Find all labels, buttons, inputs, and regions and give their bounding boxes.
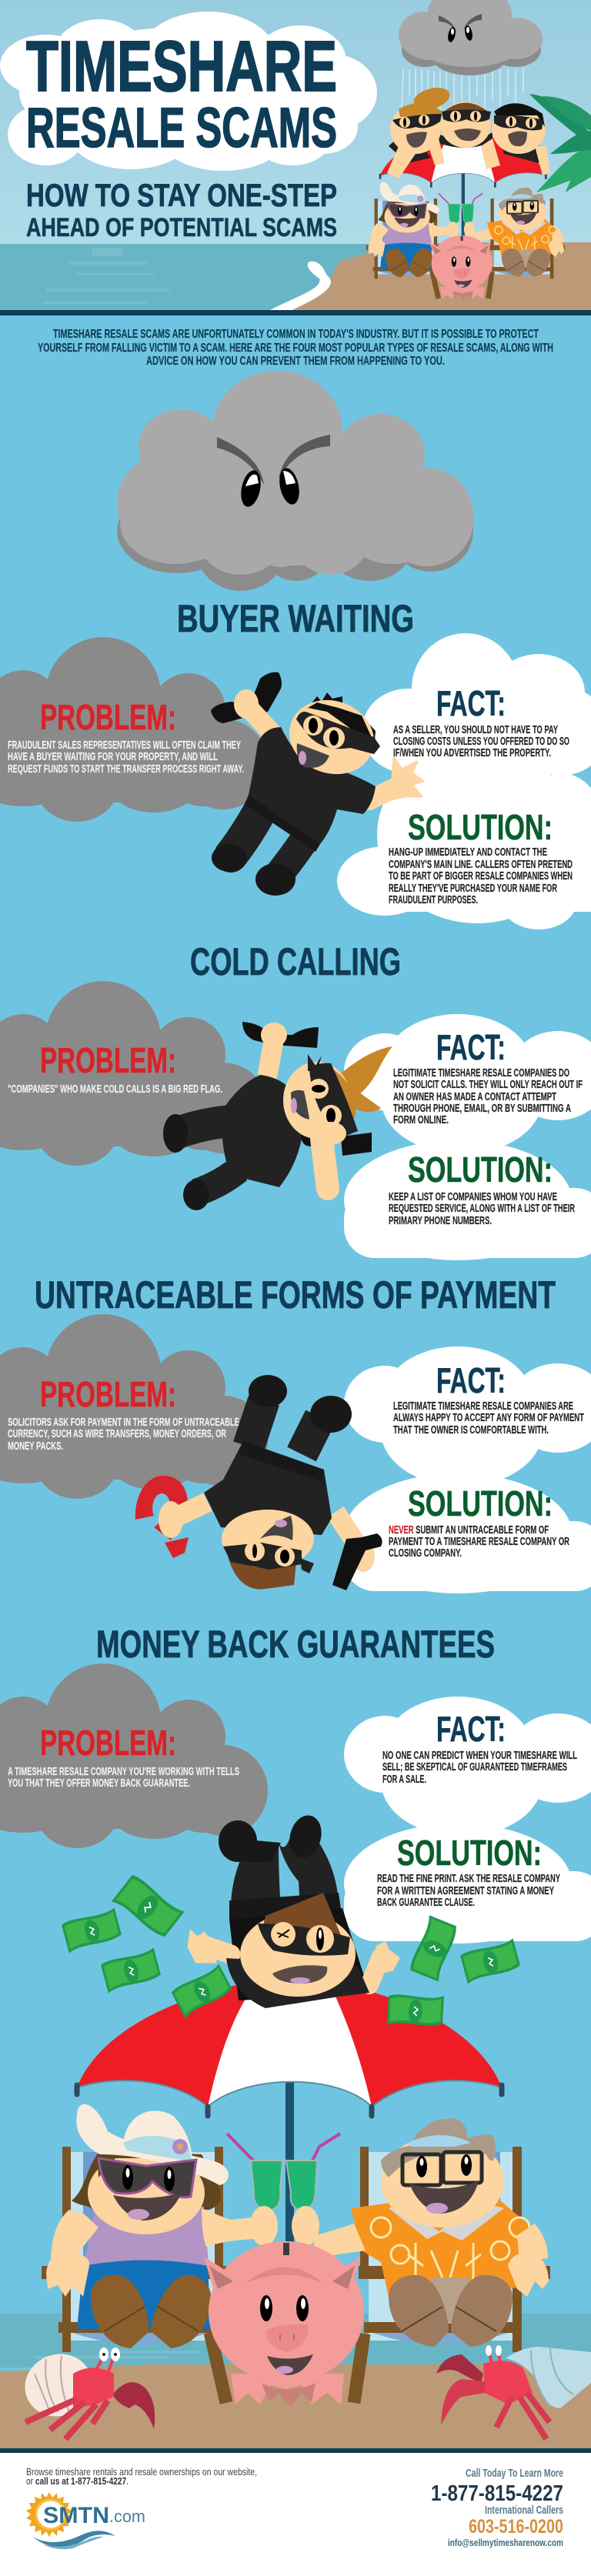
- logo: [26, 2492, 145, 2549]
- panel: cold calling fact and solution: FACT:: [436, 1027, 506, 1067]
- panel: money back fact and solution: BACK GUARANTEE CLAUSE.: [377, 1897, 475, 1909]
- hermit crab left: [16, 2344, 155, 2439]
- robber with phones: cold calling: [163, 1022, 392, 1210]
- panel: untraceable payment problem: [0, 1314, 268, 1499]
- title cloud: [0, 12, 377, 171]
- panel: buyer waiting problem: PROBLEM:: [40, 697, 176, 737]
- robber falling onto umbrella: [189, 1812, 399, 2008]
- section heading: cold calling: COLD CALLING: [190, 940, 401, 983]
- panel: money back fact and solution: FOR A SALE.: [382, 1774, 426, 1786]
- subtitle: HOW TO STAY ONE-STEP: [26, 177, 337, 213]
- panel: buyer waiting problem: HAVE A BUYER WAITING FOR YOUR PROPERTY, AND WILL: [8, 751, 218, 763]
- logo: .com: [109, 2507, 145, 2526]
- header rain cloud: [399, 0, 543, 115]
- panel: buyer waiting problem: [0, 637, 268, 822]
- beach umbrella, couple and piggy bank: [42, 1980, 550, 2407]
- panel: buyer waiting problem: REQUEST FUNDS TO START THE TRANSFER PROCESS RIGHT AWAY.: [8, 763, 244, 776]
- contact details: 603-516-0200: [469, 2516, 563, 2538]
- panel: untraceable payment fact and solution: [344, 1346, 591, 1593]
- panel: cold calling problem: "COMPANIES" WHO MAKE COLD CALLS IS A BIG RED FLAG.: [8, 1083, 222, 1096]
- panel: untraceable payment problem: MONEY PACKS.: [8, 1440, 63, 1453]
- panel: buyer waiting fact and solution: [337, 633, 591, 929]
- panel: cold calling fact and solution: PRIMARY PHONE NUMBERS.: [389, 1215, 492, 1227]
- panel: untraceable payment fact and solution: FACT:: [436, 1360, 506, 1400]
- subtitle: AHEAD OF POTENTIAL SCAMS: [26, 213, 337, 242]
- header beach scene: [0, 0, 591, 315]
- panel: money back fact and solution: [344, 1697, 591, 1944]
- panel: money back problem: YOU THAT THEY OFFER MONEY BACK GUARANTEE.: [8, 1777, 190, 1790]
- panel: untraceable payment problem: CURRENCY, SUCH AS WIRE TRANSFERS, MONEY ORDERS, OR: [8, 1428, 226, 1440]
- section heading: buyer waiting: BUYER WAITING: [177, 597, 414, 640]
- panel: untraceable payment problem: SOLICITORS ASK FOR PAYMENT IN THE FORM OF UNTRACEABLE: [8, 1416, 239, 1429]
- header beach family: [366, 133, 565, 300]
- hermit crab right: [436, 2345, 591, 2439]
- panel: untraceable payment problem: PROBLEM:: [40, 1374, 176, 1414]
- panel: money back problem: PROBLEM:: [40, 1723, 176, 1763]
- title: [26, 26, 337, 159]
- panel: money back problem: [0, 1663, 268, 1848]
- panel: money back problem: A TIMESHARE RESALE COMPANY YOU'RE WORKING WITH TELLS: [8, 1766, 239, 1778]
- lower beach ground: [0, 2308, 591, 2576]
- footer note: or call us at 1-877-815-4227.: [26, 2475, 129, 2487]
- panel: cold calling fact and solution: FORM ONLINE.: [393, 1114, 449, 1126]
- panel: buyer waiting problem: FRAUDULENT SALES REPRESENTATIVES WILL OFTEN CLAIM THEY: [8, 739, 241, 752]
- intro text: ADVICE ON HOW YOU CAN PREVENT THEM FROM HAPPENING TO YOU.: [146, 355, 445, 368]
- panel: buyer waiting fact and solution: FACT:: [436, 683, 506, 723]
- robber with phone: buyer waiting: [211, 672, 423, 896]
- palm tree: [529, 94, 591, 192]
- panel: buyer waiting fact and solution: FRAUDULENT PURPOSES.: [389, 894, 478, 906]
- subtitle: [26, 177, 337, 242]
- contact details: [431, 2467, 563, 2548]
- big angry cloud: [117, 371, 474, 591]
- logo: SMTN: [43, 2503, 109, 2528]
- header robbers on umbrella: [387, 84, 550, 179]
- panel: cold calling fact and solution: [344, 1014, 591, 1260]
- footer note: Browse timeshare rentals and resale ownerships on our website,: [26, 2466, 257, 2478]
- title: TIMESHARE: [26, 26, 337, 106]
- footer note: [26, 2466, 257, 2487]
- robber upside down with question mark: [135, 1375, 382, 1590]
- panel: cold calling problem: [0, 981, 268, 1166]
- panel: untraceable payment fact and solution: CLOSING COMPANY.: [389, 1547, 462, 1560]
- title: RESALE SCAMS: [26, 97, 337, 159]
- falling money: [61, 1872, 521, 2028]
- contact details: 1-877-815-4227: [431, 2481, 563, 2506]
- intro text: [38, 328, 553, 368]
- panel: money back fact and solution: FACT:: [436, 1709, 506, 1749]
- panel: money back fact and solution: SOLUTION:: [397, 1833, 542, 1873]
- panel: cold calling problem: PROBLEM:: [40, 1040, 176, 1080]
